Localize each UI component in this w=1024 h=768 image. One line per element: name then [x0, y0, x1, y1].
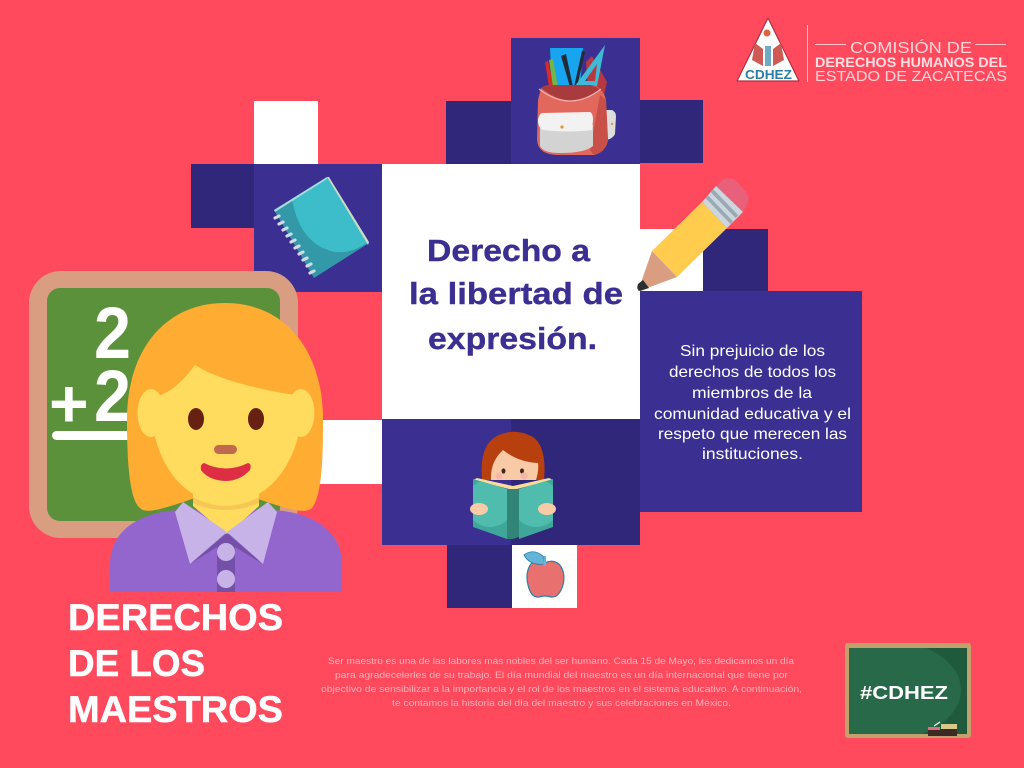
panel: side text box: [640, 291, 862, 512]
text block: sin prejuicio: [654, 343, 851, 463]
text block: sin prejuicio: miembros de la: [692, 385, 812, 402]
text block: sin prejuicio: respeto que merecen las: [658, 426, 847, 443]
icon: chalkboard with sum: +: [49, 366, 89, 442]
icon: child reading a book: [466, 432, 560, 539]
heading: derecho a la libertad de expresion: [409, 233, 623, 356]
panel: backpack square: [511, 38, 640, 164]
icon: spiral notebook: [274, 177, 369, 278]
logo: CDHEZ: ESTADO DE ZACATECAS: [815, 69, 1007, 85]
logo: CDHEZ: DERECHOS HUMANOS DEL: [815, 54, 1007, 70]
heading: derecho a la libertad de expresion: Derecho a: [427, 233, 591, 268]
title: derechos de los maestros: [68, 597, 283, 730]
text block: intro paragraph: Ser maestro es una de las labores más nobles del ser humano. Cada 15 de Mayo, les dedicamos un día: [328, 656, 795, 667]
title: derechos de los maestros: DERECHOS: [68, 597, 283, 638]
text block: sin prejuicio: instituciones.: [702, 446, 803, 463]
icon: logo triangle: [737, 18, 799, 82]
icon: apple: [524, 552, 564, 597]
title: derechos de los maestros: DE LOS: [68, 643, 205, 684]
heading: derecho a la libertad de expresion: expresión.: [428, 321, 597, 356]
logo: CDHEZ: COMISIÓN DE: [850, 40, 972, 57]
icon: backpack: [537, 45, 616, 155]
text block: sin prejuicio: derechos de todos los: [669, 364, 836, 381]
icon: logo triangle: CDHEZ: [745, 68, 792, 82]
callout: hashtag chalkboard: #CDHEZ: [860, 682, 948, 703]
icon: chalkboard with sum: [29, 271, 298, 538]
title: derechos de los maestros: MAESTROS: [68, 689, 283, 730]
logo: CDHEZ: [737, 18, 1007, 85]
text block: intro paragraph: [321, 656, 802, 709]
panel: central white square: [382, 164, 640, 419]
icon: teacher: [110, 303, 342, 592]
panel: reading child square: [382, 419, 640, 597]
text block: intro paragraph: objectivo de sensibilizar a la importancia y el rol de los maestros en el sistema educativo. A continuación,: [321, 684, 802, 695]
text block: sin prejuicio: Sin prejuicio de los: [680, 343, 825, 360]
callout: hashtag chalkboard: [845, 643, 971, 738]
icon: pencil: [637, 178, 748, 291]
panel: mosaic of squares: [191, 100, 768, 608]
panel: notebook square: [254, 164, 382, 292]
text block: sin prejuicio: comunidad educativa y el: [654, 406, 851, 423]
text block: intro paragraph: te contamos la historia del día del maestro y sus celebraciones en México.: [392, 698, 731, 709]
text block: intro paragraph: para agradecelerles de su trabajo. El día mundial del maestro es un día internacional que tiene por: [335, 670, 788, 681]
heading: derecho a la libertad de expresion: la libertad de: [409, 276, 623, 311]
icon: chalkboard with sum: 2: [94, 356, 131, 437]
icon: chalkboard with sum: 2: [94, 293, 131, 374]
